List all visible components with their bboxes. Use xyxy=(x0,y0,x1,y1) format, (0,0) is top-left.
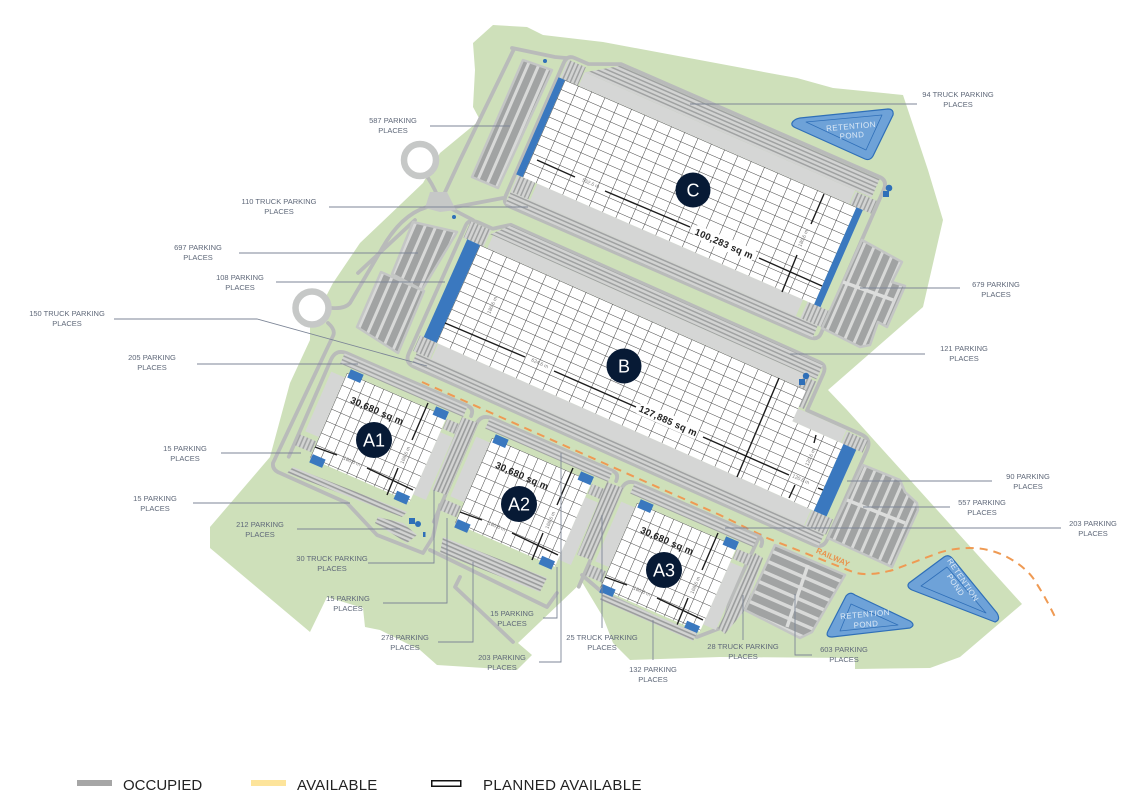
label: 557 parking places: PLACES xyxy=(967,508,997,517)
label: 15 parking places A2 east: PLACES xyxy=(497,619,527,628)
label: 557 parking places xyxy=(863,498,1006,517)
building A3 dimensions xyxy=(605,525,718,625)
label: 205 parking places: 205 PARKING xyxy=(128,353,176,362)
badge C xyxy=(676,172,710,208)
parking block C west xyxy=(472,60,552,188)
building B xyxy=(405,208,892,549)
badge A2 xyxy=(501,486,537,522)
label: 121 parking places xyxy=(790,344,988,363)
parking block B east xyxy=(828,465,918,567)
legend: available: AVAILABLE xyxy=(297,777,377,794)
label: 278 parking places xyxy=(381,562,473,652)
label: 28 truck parking places: PLACES xyxy=(728,652,758,661)
retention pond east: RETENTION xyxy=(945,557,981,603)
label: 679 parking places: PLACES xyxy=(981,290,1011,299)
label: 25 truck parking places: PLACES xyxy=(587,643,617,652)
label: 603 parking places: 603 PARKING xyxy=(820,645,868,654)
label: 25 truck parking places xyxy=(566,515,638,652)
green site area xyxy=(210,25,1022,670)
label: 203 parking places south: 203 PARKING xyxy=(478,653,526,662)
label: 121 parking places: 121 PARKING xyxy=(940,344,988,353)
label: 278 parking places: PLACES xyxy=(390,643,420,652)
label: 110 truck parking places: PLACES xyxy=(264,207,294,216)
building B dimensions: 127,885 sq m xyxy=(637,404,699,439)
label: 603 parking places xyxy=(795,594,868,664)
label: 30 truck parking places: PLACES xyxy=(317,564,347,573)
label: 15 parking places A2 west xyxy=(326,518,447,613)
label: 697 parking places xyxy=(174,243,418,262)
label: 121 parking places: PLACES xyxy=(949,354,979,363)
legend: occupied: OCCUPIED xyxy=(123,777,202,794)
label: 110 truck parking places: 110 TRUCK PARKING xyxy=(241,197,317,206)
building C xyxy=(502,43,888,341)
label: 679 parking places: 679 PARKING xyxy=(972,280,1020,289)
label: 15 parking places south-west: PLACES xyxy=(140,504,170,513)
water tanks xyxy=(409,59,892,537)
retention pond south xyxy=(827,593,913,637)
building A3 xyxy=(579,479,764,647)
building A1 dimensions: 30,680 sq m xyxy=(348,395,405,428)
retention pond north: RETENTION xyxy=(826,120,876,133)
building C dimensions xyxy=(537,160,824,292)
parking block B west xyxy=(357,222,457,353)
building A1 xyxy=(289,349,474,517)
badge A1 xyxy=(356,422,392,458)
parking block C east xyxy=(822,240,905,347)
label: 15 parking places west: 15 PARKING xyxy=(163,444,207,453)
badge A1: A1 xyxy=(363,430,385,450)
label: 587 parking places: 587 PARKING xyxy=(369,116,417,125)
retention pond north xyxy=(792,109,893,160)
label: 30 truck parking places xyxy=(296,490,434,573)
building A3 dimensions: 180.6 m xyxy=(632,586,651,598)
label: 132 parking places: PLACES xyxy=(638,675,668,684)
label: 90 parking places xyxy=(847,472,1050,491)
label: 587 parking places xyxy=(369,116,510,135)
label: 94 truck parking places xyxy=(690,90,994,109)
building A1 dimensions: 168.6 m xyxy=(400,446,412,465)
retention pond south: RETENTION xyxy=(840,608,890,621)
label: 212 parking places: PLACES xyxy=(245,530,275,539)
legend: available xyxy=(251,777,377,794)
label: 15 parking places A2 west: 15 PARKING xyxy=(326,594,370,603)
truck yards between A buildings xyxy=(287,417,763,641)
label: 30 truck parking places: 30 TRUCK PARKING xyxy=(296,554,368,563)
label: 150 truck parking places xyxy=(29,309,427,366)
label: 205 parking places xyxy=(128,353,358,372)
label: 15 parking places A2 east: 15 PARKING xyxy=(490,609,534,618)
building B dimensions: 624.6 m xyxy=(530,357,549,370)
building A1 dimensions: 180.6 m xyxy=(342,456,361,468)
parking block A3 east xyxy=(745,545,845,638)
label: 108 parking places: PLACES xyxy=(225,283,255,292)
label: 25 truck parking places: 25 TRUCK PARKING xyxy=(566,633,638,642)
building C dimensions: 180.6 m xyxy=(797,229,810,248)
label: 94 truck parking places: 94 TRUCK PARKING xyxy=(922,90,994,99)
label: 15 parking places south-west xyxy=(133,494,350,513)
badge A3 xyxy=(646,552,682,588)
building B dimensions: 120.6 m xyxy=(804,448,817,467)
label: 15 parking places west: PLACES xyxy=(170,454,200,463)
label: 679 parking places xyxy=(860,280,1020,299)
label: 28 truck parking places xyxy=(707,595,779,661)
retention pond north: POND xyxy=(839,130,865,141)
label: 94 truck parking places: PLACES xyxy=(943,100,973,109)
label: 278 parking places: 278 PARKING xyxy=(381,633,429,642)
label: 603 parking places: PLACES xyxy=(829,655,859,664)
building A2 dimensions xyxy=(460,460,573,560)
building A2 dimensions: 30,680 sq m xyxy=(493,460,550,493)
label: 587 parking places: PLACES xyxy=(378,126,408,135)
badge C: C xyxy=(686,180,700,200)
building C dimensions: 552.6 m xyxy=(581,178,600,190)
label: 110 truck parking places xyxy=(241,197,528,216)
label: 108 parking places xyxy=(216,273,445,292)
label: 212 parking places: 212 PARKING xyxy=(236,520,284,529)
label: 90 parking places: 90 PARKING xyxy=(1006,472,1050,481)
building A3 dimensions: 30,680 sq m xyxy=(638,525,695,558)
building B dimensions: 120.6 m xyxy=(791,473,810,486)
label: 203 parking places east xyxy=(725,519,1117,538)
retention pond east xyxy=(908,556,999,622)
label: 697 parking places: 697 PARKING xyxy=(174,243,222,252)
railway dashed line xyxy=(422,382,1055,617)
label: 132 parking places xyxy=(629,620,677,684)
label: 203 parking places south: PLACES xyxy=(487,663,517,672)
retention pond east: POND xyxy=(945,572,966,598)
badge B: B xyxy=(618,356,630,376)
legend: occupied xyxy=(77,777,202,794)
badge A3: A3 xyxy=(653,560,675,580)
building B dimensions: 180.6 m xyxy=(486,296,499,315)
label: 557 parking places: 557 PARKING xyxy=(958,498,1006,507)
label: 28 truck parking places: 28 TRUCK PARKING xyxy=(707,642,779,651)
label: 150 truck parking places: 150 TRUCK PARKING xyxy=(29,309,105,318)
label: 205 parking places: PLACES xyxy=(137,363,167,372)
building A2 xyxy=(434,414,619,582)
badge A2: A2 xyxy=(508,494,530,514)
label: 15 parking places west xyxy=(163,444,301,463)
label: 203 parking places east: 203 PARKING xyxy=(1069,519,1117,528)
legend: planned available: PLANNED AVAILABLE xyxy=(483,777,642,794)
label: 212 parking places xyxy=(236,520,400,539)
label: 203 parking places east: PLACES xyxy=(1078,529,1108,538)
label: 90 parking places: PLACES xyxy=(1013,482,1043,491)
access roads and roundabouts xyxy=(273,48,760,642)
label: 15 parking places A2 west: PLACES xyxy=(333,604,363,613)
railway label: RAILWAY xyxy=(815,546,852,569)
building A3 dimensions: 168.6 m xyxy=(690,576,702,595)
label: 203 parking places south xyxy=(478,453,561,672)
building A2 dimensions: 180.6 m xyxy=(487,521,506,533)
label: 150 truck parking places: PLACES xyxy=(52,319,82,328)
building B dimensions xyxy=(445,296,823,498)
badge B xyxy=(606,348,642,384)
building C dimensions: 100,283 sq m xyxy=(693,227,755,262)
label: 697 parking places: PLACES xyxy=(183,253,213,262)
building A2 dimensions: 168.6 m xyxy=(545,511,557,530)
building A1 dimensions xyxy=(315,395,428,495)
label: 15 parking places A2 east xyxy=(490,567,557,628)
label: 108 parking places: 108 PARKING xyxy=(216,273,264,282)
label: 132 parking places: 132 PARKING xyxy=(629,665,677,674)
label: 15 parking places south-west: 15 PARKING xyxy=(133,494,177,503)
retention pond south: POND xyxy=(853,619,879,630)
